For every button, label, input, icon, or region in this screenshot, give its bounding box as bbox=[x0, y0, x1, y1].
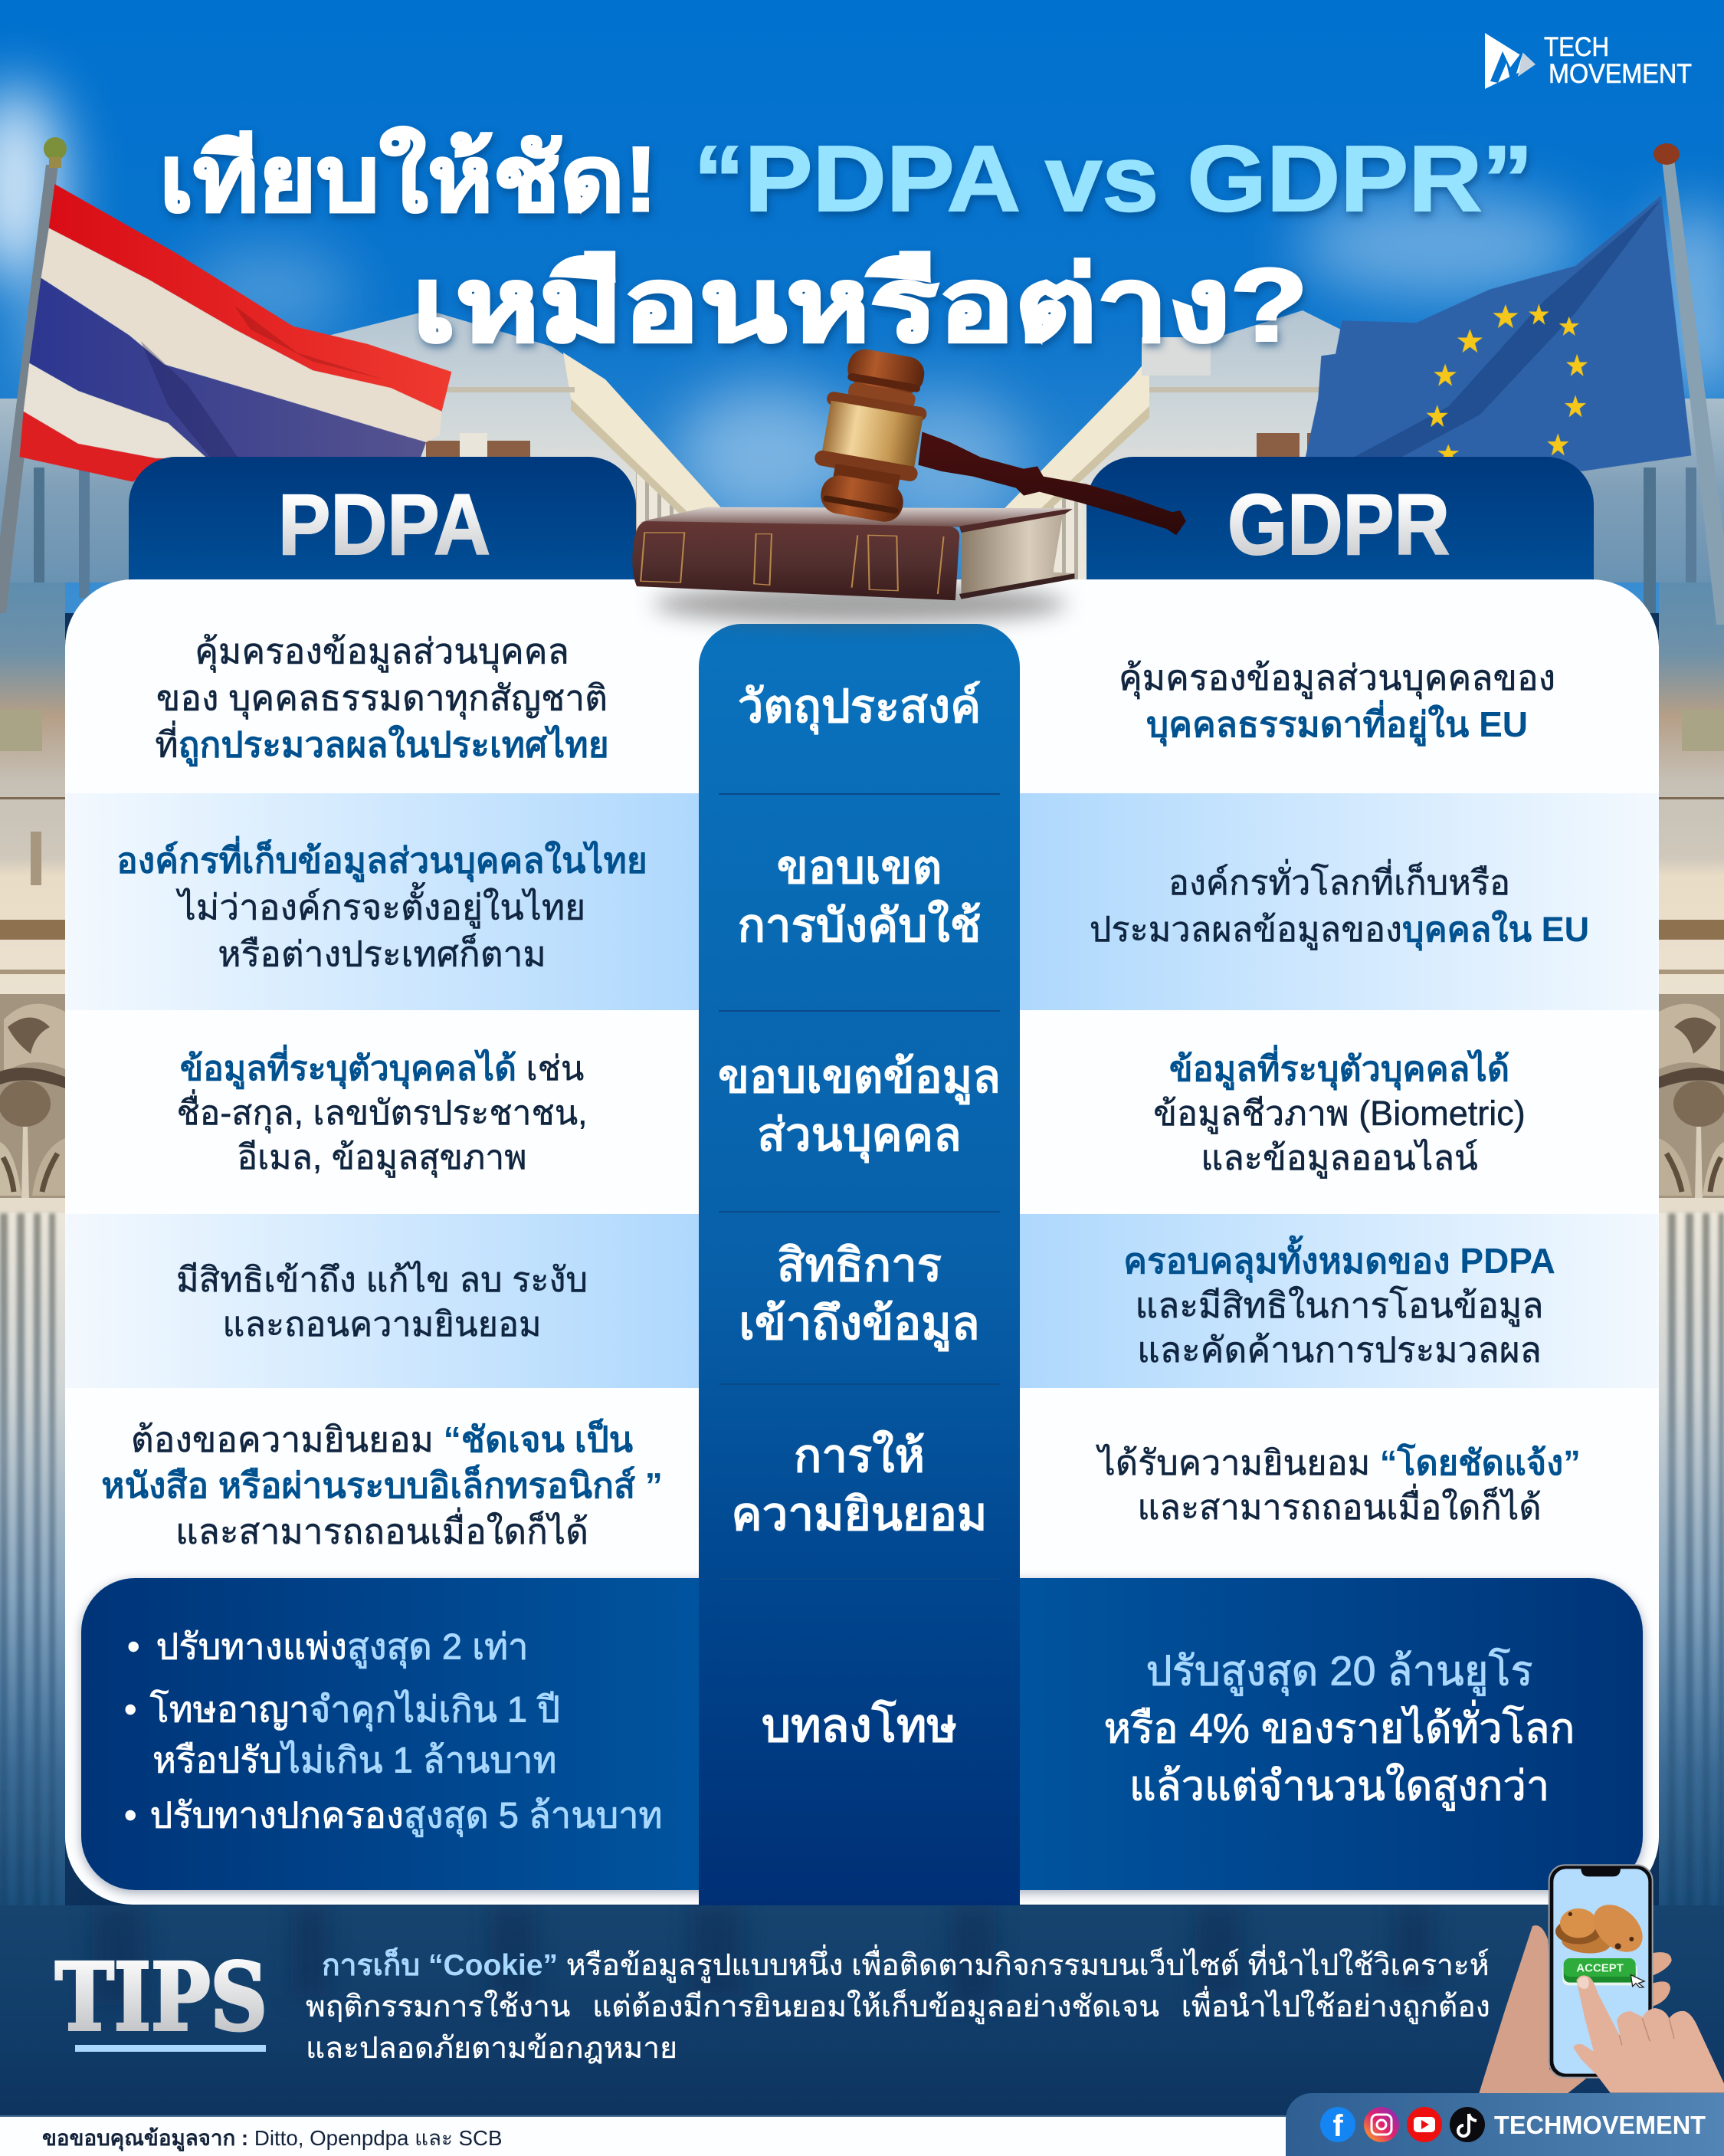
row 4 left text: มีสิทธิเข้าถึง แก้ไข ลบ ระงับ bbox=[176, 1260, 588, 1299]
row 5 left text: ต้องขอความยินยอม “ชัดเจน เป็น bbox=[131, 1419, 633, 1459]
title: เทียบให้ชัด! bbox=[159, 126, 657, 231]
row 2 left text: หรือต่างประเทศก็ตาม bbox=[218, 934, 546, 973]
row 4 center heading bbox=[739, 1239, 980, 1352]
row divider lines bbox=[719, 793, 1000, 1580]
tips text: การเก็บ “Cookie” หรือข้อมูลรูปแบบหนึ่ง เพื่อติดตามกิจกรรมบนเว็บไซต์ ที่นำไปใช้วิเคราะห์ bbox=[322, 1949, 1490, 1982]
left side wall bbox=[0, 399, 146, 1213]
PDPA label: PDPA bbox=[278, 477, 490, 573]
row 3 left text: อีเมล, ข้อมูลสุขภาพ bbox=[237, 1139, 527, 1176]
row 2 center heading bbox=[738, 842, 981, 951]
fluted columns bbox=[0, 1213, 1724, 1908]
row 3 right text bbox=[1153, 1045, 1526, 1179]
tips text: และปลอดภัยตามข้อกฎหมาย bbox=[306, 2032, 677, 2065]
row 4 center heading: เข้าถึงข้อมูล bbox=[739, 1298, 980, 1349]
logo mark bbox=[1485, 33, 1536, 89]
cookies bbox=[1555, 1895, 1652, 1961]
row 2 left text bbox=[116, 835, 647, 973]
icon: youtube bbox=[1407, 2107, 1442, 2142]
row 4 right text: และมีสิทธิในการโอนข้อมูล bbox=[1136, 1285, 1543, 1325]
penalty panel bbox=[81, 1578, 1643, 1890]
row 2 center heading: การบังคับใช้ bbox=[738, 900, 981, 951]
footer credit bar bbox=[0, 2115, 1295, 2156]
right side wall bbox=[1578, 399, 1724, 1213]
row 1 left text bbox=[155, 632, 609, 766]
accept button: ACCEPT bbox=[1576, 1963, 1624, 1975]
phone screen bbox=[1553, 1869, 1648, 2074]
row 2 center heading: ขอบเขต bbox=[777, 842, 942, 893]
tab: GDPR bbox=[1087, 457, 1594, 583]
book bbox=[632, 507, 1074, 600]
row 6 left penalties bbox=[124, 1626, 663, 1838]
icon: facebook bbox=[1320, 2107, 1355, 2143]
row 5 right text bbox=[1096, 1443, 1581, 1527]
book shadow bbox=[653, 584, 1067, 624]
row 5 left text bbox=[101, 1418, 663, 1551]
title: “PDPA vs GDPR” bbox=[693, 126, 1533, 231]
row 2 right band bbox=[1020, 793, 1659, 1010]
comparison panel bbox=[65, 579, 1659, 1905]
social bar bbox=[1286, 2093, 1724, 2156]
tips text: พฤติกรรมการใช้งาน แต่ต้องมีการยินยอมให้เก็บข้อมูลอย่างชัดเจน เพื่อนำไปใช้อย่างถูกต้อง bbox=[306, 1990, 1490, 2023]
credit text: ขอขอบคุณข้อมูลจาก : Ditto, Openpdpa และ SCB bbox=[42, 2126, 502, 2150]
icon: instagram bbox=[1364, 2107, 1399, 2142]
row 1 right text: บุคคลธรรมดาที่อยู่ใน EU bbox=[1146, 704, 1528, 744]
row 3 left text bbox=[176, 1044, 588, 1178]
row 3 center heading: ส่วนบุคคล bbox=[757, 1109, 962, 1160]
back fingers bbox=[1651, 1952, 1672, 2007]
tips text bbox=[306, 1945, 1501, 2072]
gavel head bbox=[806, 343, 938, 527]
row 5 center heading bbox=[731, 1430, 987, 1540]
phone and hands bbox=[1456, 1855, 1724, 2100]
row 4 right text bbox=[1123, 1236, 1555, 1370]
left flagpole bbox=[0, 137, 67, 613]
row 5 right text: ได้รับความยินยอม “โดยชัดแจ้ง” bbox=[1098, 1443, 1581, 1482]
row 3 center heading bbox=[718, 1051, 1001, 1163]
row 4 center heading: สิทธิการ bbox=[777, 1239, 942, 1291]
icon: facebook: f bbox=[1332, 2109, 1343, 2143]
bullet 2 continuation: หรือปรับไม่เกิน 1 ล้านบาท bbox=[152, 1740, 556, 1780]
left hand bbox=[1479, 1925, 1586, 2094]
row 5 left text: และสามารถถอนเมื่อใดก็ได้ bbox=[175, 1511, 588, 1551]
title bbox=[159, 126, 1533, 363]
row 4 right band bbox=[1020, 1214, 1659, 1388]
right building bbox=[981, 310, 1402, 605]
icon: tiktok bbox=[1450, 2107, 1485, 2142]
row 2 right text bbox=[1090, 858, 1589, 951]
phone body bbox=[1549, 1865, 1653, 2078]
EU flag bbox=[1306, 195, 1691, 471]
right flagpole bbox=[1654, 143, 1724, 625]
row 4 left text: และถอนความยินยอม bbox=[222, 1304, 542, 1344]
notch bbox=[1581, 1868, 1621, 1876]
row 6 right penalties bbox=[1020, 1643, 1659, 1815]
row 1 left text: ที่ถูกประมวลผลในประเทศไทย bbox=[155, 725, 609, 765]
row 2 left text: ไม่ว่าองค์กรจะตั้งอยู่ในไทย bbox=[179, 888, 585, 927]
handle bbox=[918, 432, 1186, 535]
tab: PDPA bbox=[129, 457, 636, 583]
handle text: TECHMOVEMENT bbox=[1494, 2111, 1706, 2139]
accept button bbox=[1562, 1958, 1637, 1985]
book and gavel bbox=[632, 349, 1186, 635]
lower navy band bbox=[0, 1905, 1724, 2156]
row 1 left text: คุ้มครองข้อมูลส่วนบุคคล bbox=[195, 632, 569, 671]
row 1 center heading: วัตถุประสงค์ bbox=[738, 681, 981, 732]
row 5 left text: หนังสือ หรือผ่านระบบอิเล็กทรอนิกส์ ” bbox=[101, 1465, 663, 1505]
row 1 right text bbox=[1119, 658, 1555, 747]
row 6 center heading: บทลงโทษ bbox=[762, 1700, 957, 1751]
row 3 right text: ข้อมูลที่ระบุตัวบุคคลได้ bbox=[1169, 1049, 1509, 1088]
clouds bbox=[0, 84, 1724, 529]
logo text: TECH bbox=[1544, 32, 1609, 62]
row 4 left text bbox=[176, 1260, 588, 1344]
left building bbox=[322, 310, 747, 605]
logo text bbox=[1544, 32, 1692, 89]
bullet 3: • ปรับทางปกครองสูงสุด 5 ล้านบาท bbox=[124, 1795, 663, 1835]
row 5 center heading: การให้ bbox=[794, 1430, 925, 1482]
row 2 right text: องค์กรทั่วโลกที่เก็บหรือ bbox=[1168, 863, 1510, 902]
center column bbox=[699, 624, 1020, 1905]
row 4 right text: ครอบคลุมทั้งหมดของ PDPA bbox=[1123, 1241, 1555, 1281]
logo bbox=[464, 32, 1692, 293]
row 6 right penalties: หรือ 4% ของรายได้ทั่วโลก bbox=[1104, 1706, 1575, 1752]
row 4 right text: และคัดค้านการประมวลผล bbox=[1137, 1330, 1542, 1370]
row 6 right penalties: แล้วแต่จำนวนใดสูงกว่า bbox=[1129, 1763, 1549, 1809]
row 3 left text: ชื่อ-สกุล, เลขบัตรประชาชน, bbox=[176, 1094, 588, 1132]
sky bbox=[0, 0, 1724, 613]
row 3 right text: ข้อมูลชีวภาพ (Biometric) bbox=[1153, 1094, 1526, 1133]
row 4 left band bbox=[65, 1214, 699, 1388]
Thai flag bbox=[20, 184, 451, 482]
row 1 left text: ของ บุคคลธรรมดาทุกสัญชาติ bbox=[156, 678, 608, 717]
row 5 right text: และสามารถถอนเมื่อใดก็ได้ bbox=[1137, 1488, 1542, 1527]
row 5 center heading: ความยินยอม bbox=[731, 1488, 987, 1540]
bullet 1: • ปรับทางแพ่งสูงสุด 2 เท่า bbox=[127, 1626, 529, 1666]
bullet 2: • โทษอาญาจำคุกไม่เกิน 1 ปี bbox=[124, 1689, 560, 1729]
row 3 center heading: ขอบเขตข้อมูล bbox=[718, 1051, 1001, 1102]
row 2 left band bbox=[65, 793, 699, 1010]
row 6 right penalties: ปรับสูงสุด 20 ล้านยูโร bbox=[1146, 1648, 1532, 1694]
cursor bbox=[1631, 1975, 1644, 1987]
row 3 left text: ข้อมูลที่ระบุตัวบุคคลได้ เช่น bbox=[180, 1050, 584, 1088]
row 2 right text: ประมวลผลข้อมูลของบุคคลใน EU bbox=[1090, 910, 1589, 949]
row 2 left text: องค์กรที่เก็บข้อมูลส่วนบุคคลในไทย bbox=[116, 840, 647, 880]
pointing hand bbox=[1573, 1975, 1724, 2093]
row 3 right text: และข้อมูลออนไลน์ bbox=[1201, 1138, 1478, 1177]
row 1 right text: คุ้มครองข้อมูลส่วนบุคคลของ bbox=[1119, 658, 1555, 697]
tab labels bbox=[278, 477, 1450, 573]
title: เหมือนหรือต่าง? bbox=[412, 248, 1308, 363]
GDPR label: GDPR bbox=[1227, 477, 1450, 573]
